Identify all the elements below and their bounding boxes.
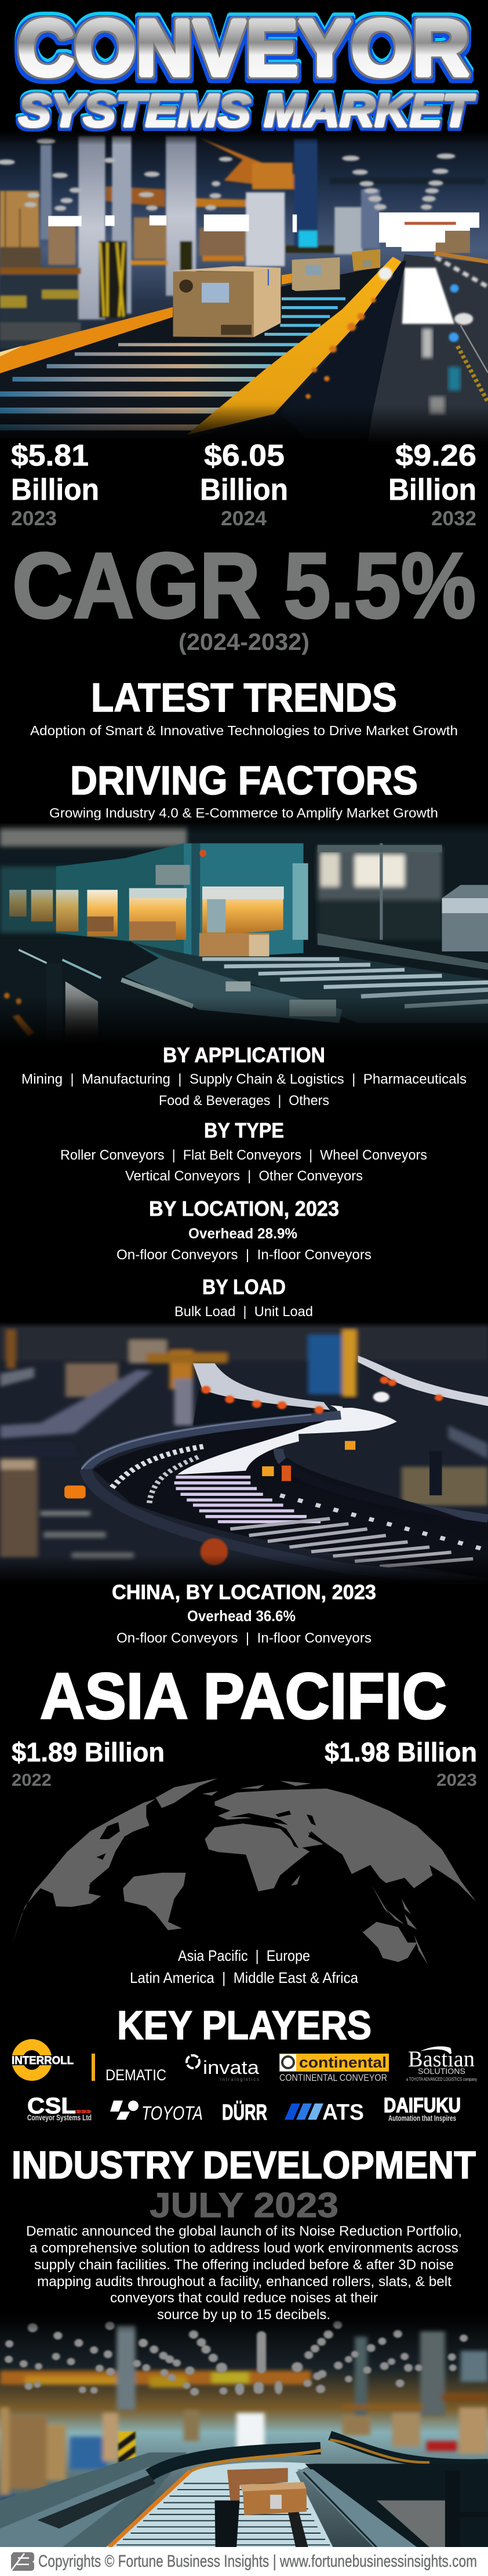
regional value: 2023: $1.98 Billion (325, 1737, 477, 1767)
regional value: 2023: 2023 (436, 1771, 477, 1790)
title line: conveyor: CONVEYOR (17, 3, 469, 93)
photo: curved roller conveyor (0, 1322, 488, 1583)
region list: Latin America | Middle East & Africa (130, 1969, 358, 1986)
segment: by location: BY LOCATION, 2023 (149, 1197, 339, 1220)
logo: daifuku: Automation that Inspires (388, 2113, 456, 2123)
back boxes (292, 257, 340, 291)
logo: csl conveyor systems (27, 2094, 92, 2122)
segment: by application: BY APPLICATION (163, 1043, 325, 1067)
segment: by application (21, 1043, 467, 1109)
logo: daifuku: DAIFUKU (384, 2094, 461, 2117)
text: development description: Dematic announced the global launch of its Noise Reduction Portfolio, (26, 2223, 462, 2239)
stat: 2032 value: 2032 (431, 507, 476, 530)
stat: 2024 value: 2024 (221, 507, 267, 530)
logo: ats (285, 2100, 364, 2125)
right floor (367, 255, 488, 444)
photo: warehouse floor with parcels (0, 2309, 488, 2547)
logo: toyota: TOYOTA (141, 2102, 203, 2124)
china share: CHINA, BY LOCATION, 2023 (112, 1581, 376, 1604)
logo: continental conveyor: continental (299, 2054, 387, 2071)
logo: dematic (92, 2054, 166, 2084)
regional value: 2022 (12, 1737, 165, 1790)
rails (86, 1415, 341, 1469)
footer bar (0, 2547, 488, 2576)
stat: 2032 value: $9.26 (395, 439, 476, 473)
logo: toyota (110, 2101, 203, 2124)
segment: by type: Vertical Conveyors | Other Conveyors (125, 1168, 363, 1184)
text: development description: conveyors that could reduce noises at their (110, 2290, 378, 2306)
region list (130, 1947, 358, 1986)
map: globe (12, 1778, 476, 1964)
regional value: 2022: $1.89 Billion (12, 1737, 165, 1767)
logo: invata: invata (203, 2057, 259, 2078)
stat: 2024 value (200, 439, 288, 530)
heading: key players: KEY PLAYERS (117, 2003, 372, 2048)
photo: warehouse conveyor with cardboard box (0, 130, 488, 444)
segment: by type: BY TYPE (204, 1118, 284, 1142)
lights (201, 1376, 443, 1414)
segment: by type (60, 1118, 427, 1184)
regional value: 2022: 2022 (12, 1771, 52, 1790)
roller bed (106, 2462, 333, 2547)
conveyor plates (134, 943, 488, 1023)
text: development description: source by up to 15 decibels. (157, 2307, 330, 2323)
stat: 2024 value: Billion (200, 473, 288, 507)
segment: by type: Roller Conveyors | Flat Belt Conveyors | Wheel Conveyors (60, 1147, 427, 1163)
heading: latest trends: LATEST TRENDS (91, 675, 397, 720)
stat: 2023 value (11, 439, 99, 530)
region list: Asia Pacific | Europe (178, 1947, 310, 1964)
stat: 2024 value: $6.05 (204, 439, 285, 473)
segment: by load: BY LOAD (202, 1275, 286, 1299)
rails (0, 307, 173, 373)
segment: by location: Overhead 28.9% (188, 1226, 297, 1242)
logo: durr: DÜRR (222, 2100, 267, 2125)
roller bed (0, 266, 385, 382)
logo: continental conveyor (279, 2054, 389, 2083)
heading: driving factors: DRIVING FACTORS (70, 758, 418, 803)
text: latest trends detail: Adoption of Smart & Innovative Technologies to Drive Market Growth (30, 723, 458, 738)
logo: invata (187, 2055, 259, 2082)
logo: dematic: DEMATIC (105, 2066, 166, 2084)
stat: 2023 value: Billion (11, 473, 99, 507)
logo: continental conveyor: CONTINENTAL CONVEYOR (279, 2072, 387, 2083)
text: development description: a comprehensive solution to address loud work environments across (30, 2240, 458, 2256)
regional value: 2023 (325, 1737, 477, 1790)
segment: by location: On-floor Conveyors | In-floor Conveyors (116, 1247, 372, 1263)
date: july 2023: JULY 2023 (150, 2186, 338, 2225)
china share: On-floor Conveyors | In-floor Conveyors (116, 1630, 372, 1646)
stat: 2023 value: 2023 (11, 507, 57, 530)
china share (112, 1581, 376, 1646)
logo: csl conveyor systems: CSL (27, 2094, 76, 2119)
logo: bastian solutions (406, 2047, 477, 2082)
logo: ats: ATS (322, 2100, 364, 2125)
heading: asia pacific: ASIA PACIFIC (40, 1660, 447, 1732)
stat: 2032 value: Billion (388, 473, 476, 507)
segment: by load (174, 1275, 313, 1320)
floor and frame (0, 2453, 187, 2547)
icon: fortune business insights mark (11, 2552, 34, 2571)
logo: bastian solutions: Bastian (408, 2047, 475, 2072)
logo: interroll (12, 2039, 74, 2081)
stat: 2023 value: $5.81 (11, 439, 89, 473)
text: development description (26, 2223, 462, 2323)
segment: by location (116, 1197, 372, 1263)
text: development description: supply chain facilities. The offering included before & after 3D noise (34, 2257, 454, 2273)
photo: production line machines (0, 820, 488, 1047)
logo: daifuku (384, 2094, 461, 2123)
segment: by application: Food & Beverages | Others (159, 1093, 329, 1109)
title line: systems market: SYSTEMS MARKET (19, 85, 475, 136)
text: development description: mapping audits throughout a facility, enhanced rollers, slats, & belt (37, 2274, 451, 2290)
bed (93, 1412, 488, 1578)
segment: by load: Bulk Load | Unit Load (174, 1304, 313, 1320)
logo: invata: intralogistics (220, 2077, 259, 2082)
cagr period: (2024-2032) (179, 628, 309, 655)
segment: by application: Mining | Manufacturing | Supply Chain & Logistics | Pharmaceuticals (21, 1071, 467, 1087)
title (17, 3, 475, 136)
china share: Overhead 36.6% (187, 1607, 296, 1625)
stat: 2032 value (388, 439, 476, 530)
parcels (227, 2468, 288, 2501)
logo: bastian solutions: SOLUTIONS (418, 2066, 465, 2076)
logo: interroll: INTERROLL (12, 2055, 74, 2067)
main box (173, 266, 281, 271)
logo: csl conveyor systems: Conveyor Systems Ltd (27, 2113, 92, 2122)
text: driving factors detail: Growing Industry 4.0 & E-Commerce to Amplify Market Growth (49, 805, 438, 820)
